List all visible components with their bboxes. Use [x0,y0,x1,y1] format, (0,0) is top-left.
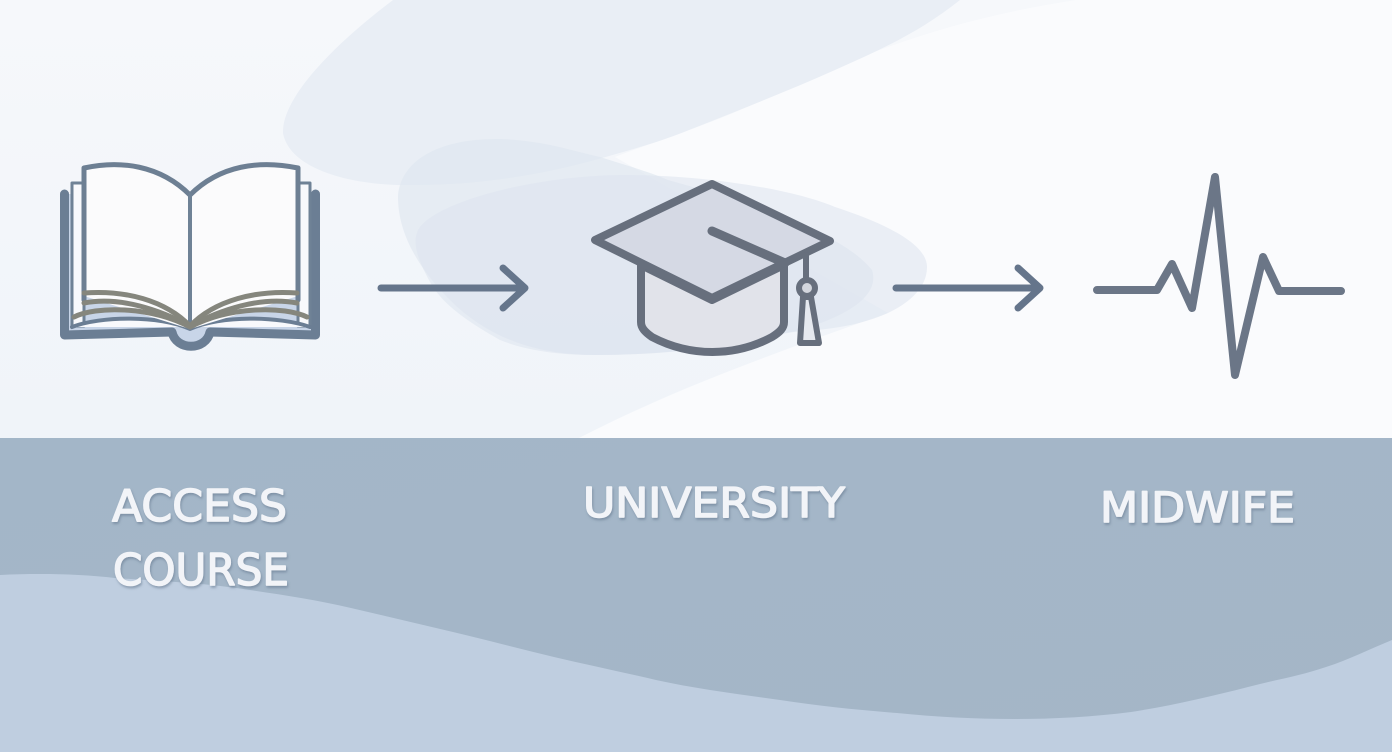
icon: heartbeat line [1097,177,1341,375]
icon: open book [64,165,316,346]
label: university: UNIVERSITY [583,479,846,527]
label: midwife: MIDWIFE [1100,483,1295,532]
arrow 2 [896,268,1040,308]
label: access course: COURSE [113,545,289,596]
arrow 1 [381,268,525,308]
bottom wave [0,574,1392,752]
label: access course: ACCESS [112,481,287,532]
background [0,0,1392,440]
bottom band [0,438,1392,752]
label: access course [112,481,289,596]
icon: graduation cap [595,184,830,352]
book pages [74,292,307,327]
